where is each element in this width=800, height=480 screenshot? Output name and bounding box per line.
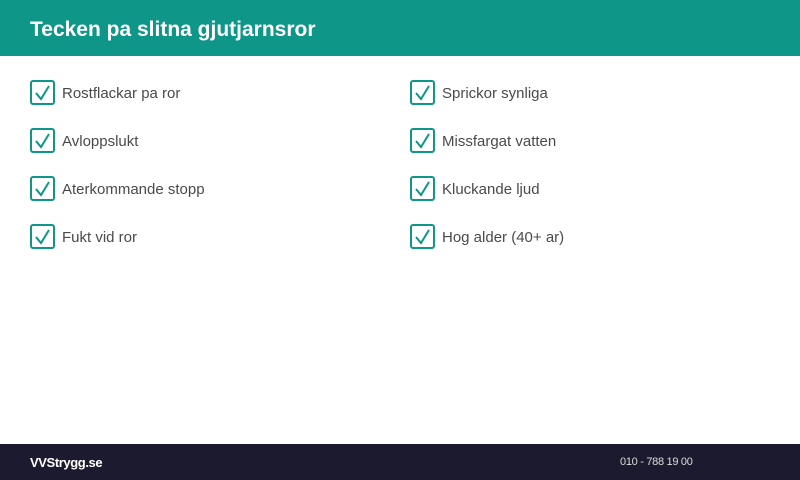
item: Rostflackar pa ror xyxy=(30,80,180,105)
item: Avloppslukt: Avloppslukt xyxy=(62,133,138,150)
item: Hog alder: Hog alder (40+ ar) xyxy=(442,229,564,246)
item: Fukt vid ror: Fukt vid ror xyxy=(62,229,137,246)
item: Hog alder xyxy=(410,224,564,249)
item: Missfargat vatten xyxy=(410,128,556,153)
item: Avloppslukt xyxy=(30,128,138,153)
phone: 010 - 788 19 00 xyxy=(620,456,693,468)
item: Sprickor synliga: Sprickor synliga xyxy=(442,85,548,102)
brand: VVStrygg.se xyxy=(30,455,102,470)
item: Missfargat vatten: Missfargat vatten xyxy=(442,133,556,150)
item: Aterkommande stopp: Aterkommande stopp xyxy=(62,181,205,198)
title: Tecken pa slitna gjutjarnsror xyxy=(30,18,316,41)
item: Kluckande ljud xyxy=(410,176,540,201)
item: Rostflackar pa ror: Rostflackar pa ror xyxy=(62,85,180,102)
footer xyxy=(0,444,800,480)
item: Aterkommande stopp xyxy=(30,176,205,201)
header xyxy=(0,0,800,56)
item: Sprickor synliga xyxy=(410,80,548,105)
item: Kluckande ljud: Kluckande ljud xyxy=(442,181,540,198)
item: Fukt vid ror xyxy=(30,224,137,249)
